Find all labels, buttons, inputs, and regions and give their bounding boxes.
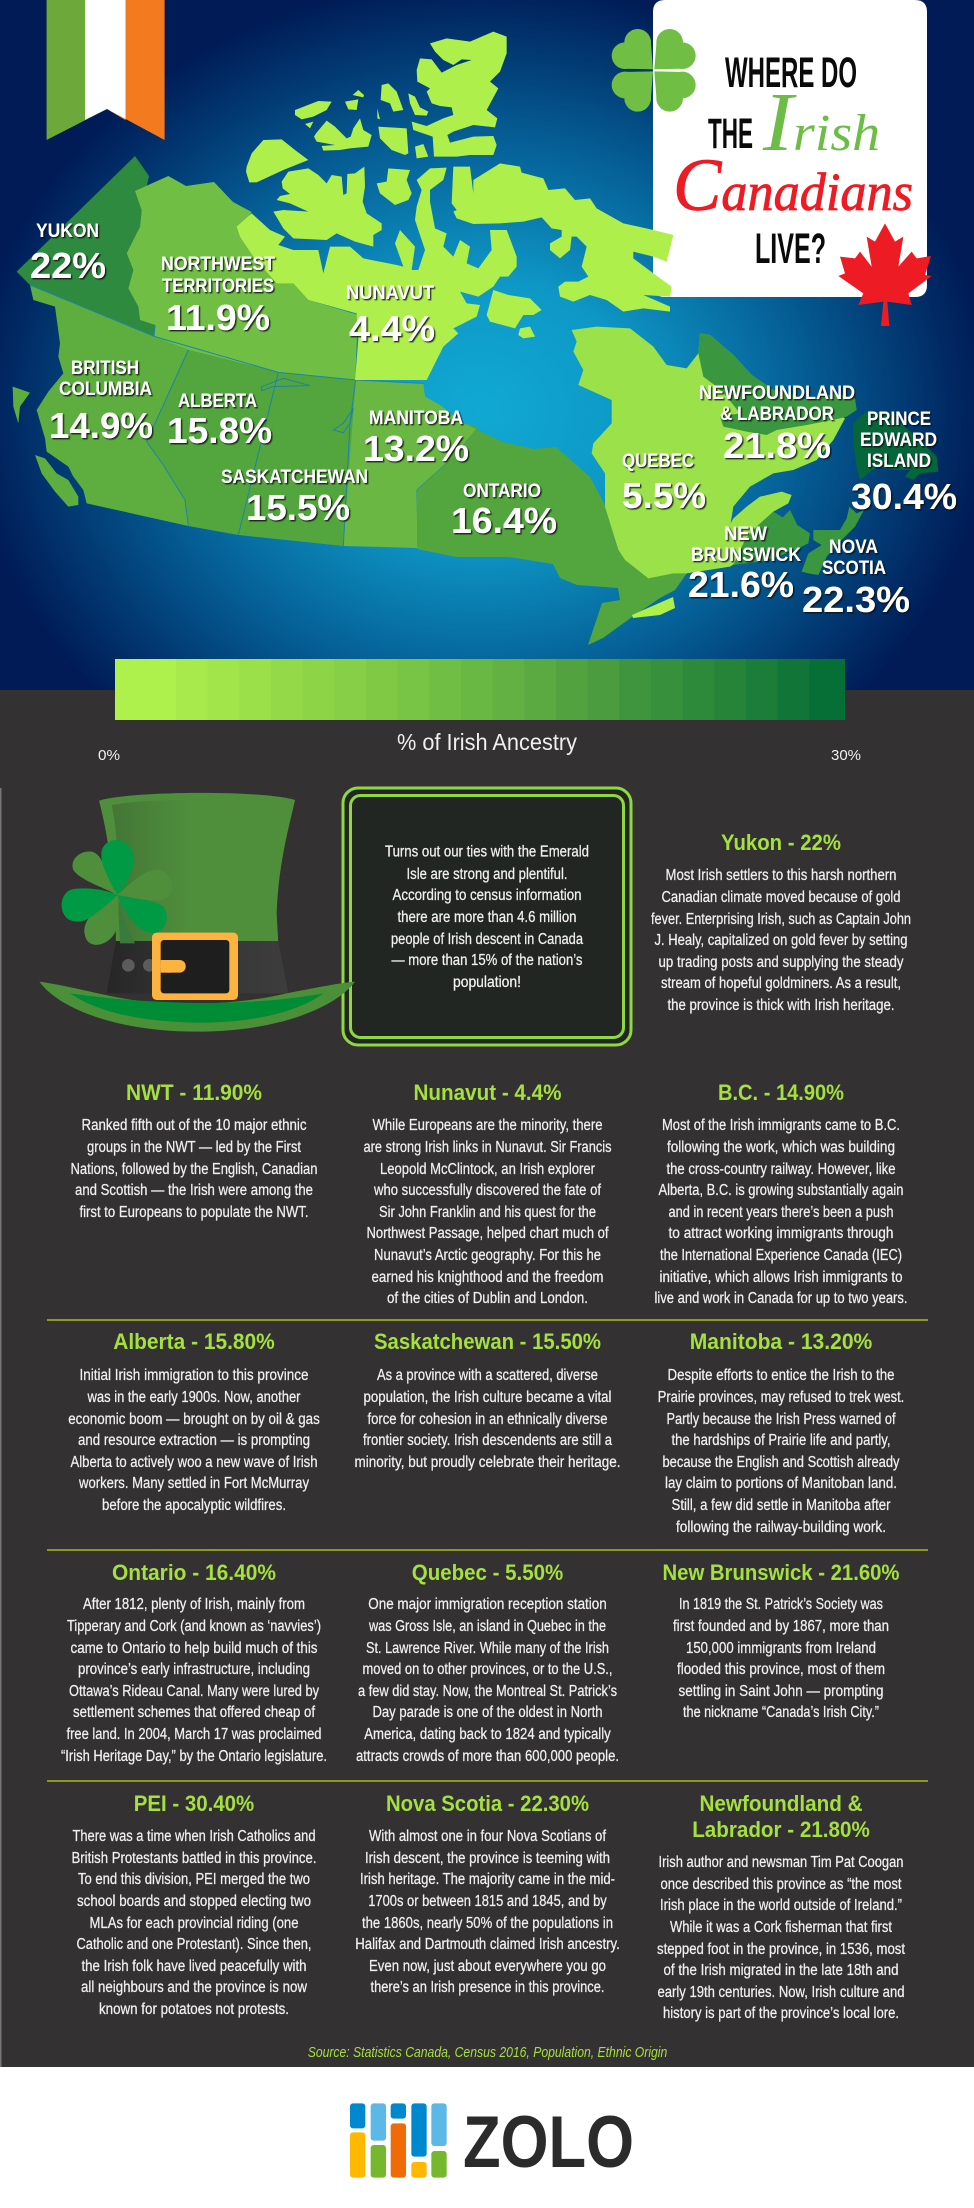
- text block: Quebec: One major immigration reception station: [368, 1596, 607, 1613]
- text block: B.C.: initiative, which allows Irish immigrants to: [660, 1269, 902, 1286]
- text block: NWT: Ranked fifth out of the 10 major ethnic: [82, 1117, 307, 1134]
- text block: PEI: the Irish folk have lived peacefully with: [82, 1958, 306, 1975]
- text block: Nova Scotia: there’s an Irish presence in this province.: [370, 1979, 604, 1996]
- text block: Quebec: Day parade is one of the oldest in North: [372, 1704, 602, 1721]
- text block: Yukon: [651, 830, 911, 1014]
- text block: New Brunswick: 150,000 immigrants from Ireland: [686, 1640, 876, 1657]
- text block: Alberta: Alberta to actively woo a new wave of Irish: [70, 1454, 318, 1471]
- text block: New Brunswick: the nickname “Canada’s Irish City.”: [683, 1704, 879, 1721]
- label: Saskatchewan: SASKATCHEWAN: [221, 467, 368, 488]
- text block: Newfoundland and Labrador: Irish place in the world outside of Ireland.”: [660, 1897, 902, 1914]
- callout text: Turns out our ties with the Emerald: [385, 844, 589, 860]
- text block: Saskatchewan: As a province with a scattered, diverse: [377, 1367, 598, 1384]
- label: New Brunswick: 21.6%: [688, 564, 794, 605]
- label: Alberta: 15.8%: [167, 410, 272, 451]
- text block: Ontario: free land. In 2004, March 17 was proclaimed: [66, 1726, 322, 1743]
- label: Quebec: 5.5%: [622, 475, 706, 516]
- text block: PEI: school boards and stopped electing two: [77, 1893, 311, 1910]
- province: Ontario: [417, 423, 687, 645]
- label: British Columbia: BRITISH: [71, 358, 139, 379]
- province: New Brunswick: [733, 510, 810, 565]
- title card: [653, 0, 927, 297]
- hat band: [107, 941, 288, 993]
- ribbon: Irish flag: [47, 0, 165, 140]
- logo: Zolo: [350, 2102, 634, 2183]
- text block: Yukon: J. Healy, capitalized on gold fever by setting: [654, 932, 908, 949]
- label: Prince Edward Island: [851, 409, 957, 517]
- callout text: According to census information: [392, 887, 582, 904]
- text block: Quebec: a few did stay. Now, the Montreal St. Patrick’s: [358, 1683, 617, 1700]
- label: New Brunswick: BRUNSWICK: [691, 545, 801, 566]
- text block: B.C.: Most of the Irish immigrants came to B.C.: [662, 1117, 900, 1134]
- text block: Ontario: Ottawa’s Rideau Canal. Many were lured by: [69, 1683, 319, 1700]
- province: Nunavut mainland: [237, 168, 517, 380]
- text block: Alberta: workers. Many settled in Fort McMurray: [78, 1475, 309, 1492]
- label: Yukon: [30, 221, 106, 286]
- text block: PEI: all neighbours and the province is now: [81, 1979, 308, 1996]
- text block: B.C.: B.C. - 14.90%: [718, 1080, 844, 1105]
- text block: Nunavut: [364, 1080, 612, 1307]
- text block: Newfoundland and Labrador: stepped foot in the province, in 1536, most: [657, 1941, 906, 1958]
- label: Northwest Territories: TERRITORIES: [162, 276, 274, 297]
- label: British Columbia: 14.9%: [49, 405, 153, 446]
- text block: Nova Scotia: Nova Scotia - 22.30%: [386, 1791, 589, 1816]
- title heading: LIVE?: [755, 225, 826, 273]
- callout outer frame: [343, 788, 631, 1045]
- hat crown shading: [112, 800, 287, 943]
- label: Manitoba: MANITOBA: [369, 408, 463, 429]
- label: Prince Edward Island: ISLAND: [867, 451, 931, 472]
- map of Canada: [13, 32, 938, 645]
- text block: Newfoundland and Labrador: history is part of the province’s local lore.: [663, 2005, 899, 2022]
- label: Alberta: ALBERTA: [178, 391, 257, 412]
- southern Ontario lime patch: [632, 597, 675, 618]
- text block: Quebec: moved on to other provinces, or to the U.S.,: [362, 1661, 612, 1678]
- label: Alberta: [167, 391, 272, 451]
- province: Nova Scotia: [802, 507, 864, 575]
- hat brim inner: [70, 993, 323, 1023]
- text block: Ontario: Tipperary and Cork (and known as ‘navvies’): [67, 1618, 321, 1635]
- label: Newfoundland and Labrador: NEWFOUNDLAND: [699, 383, 855, 404]
- text block: Newfoundland and Labrador: Irish author and newsman Tim Pat Coogan: [658, 1854, 904, 1871]
- text block: Nunavut: While Europeans are the minority, there: [372, 1117, 602, 1134]
- legend: colour scale bar: [115, 659, 845, 720]
- text block: Nova Scotia: Even now, just about everywhere you go: [369, 1958, 606, 1975]
- text block: B.C.: the cross-country railway. However, like: [666, 1161, 896, 1178]
- legend maximum: 30%: [831, 747, 861, 764]
- text block: Ontario: came to Ontario to help build much of this: [70, 1640, 318, 1657]
- text block: Nova Scotia: Irish descent, the province is teeming with: [365, 1850, 610, 1867]
- panel: white footer: [0, 2067, 974, 2208]
- label: Quebec: QUEBEC: [622, 451, 694, 472]
- text block: Nova Scotia: the 1860s, nearly 50% of the populations in: [362, 1915, 613, 1932]
- text block: Manitoba: Partly because the Irish Press warned of: [666, 1411, 896, 1428]
- island: Vancouver Island: [35, 455, 78, 507]
- text block: PEI: MLAs for each provincial riding (one: [90, 1915, 298, 1932]
- provincial boundary lines: [30, 285, 447, 552]
- province: Quebec: [572, 327, 845, 578]
- text block: NWT: NWT - 11.90%: [126, 1080, 262, 1105]
- text block: Ontario: [61, 1560, 327, 1765]
- text block: Manitoba: the hardships of Prairie life and partly,: [672, 1432, 890, 1449]
- text block: Nunavut: earned his knighthood and the freedom: [372, 1269, 604, 1286]
- text block: B.C.: following the work, which was building: [667, 1139, 895, 1156]
- text block: PEI: PEI - 30.40%: [134, 1791, 254, 1816]
- island: Banks: [246, 139, 308, 182]
- label: Yukon: 22%: [30, 245, 106, 286]
- text block: PEI: To end this division, PEI merged the two: [78, 1871, 310, 1888]
- text block: Nunavut: Nunavut - 4.4%: [414, 1080, 562, 1105]
- text block: Saskatchewan: [354, 1329, 620, 1471]
- text block: Yukon: Canadian climate moved because of gold: [662, 889, 900, 906]
- logo wordmark: ZOLO: [463, 2102, 634, 2183]
- province: Alberta: [147, 350, 278, 535]
- callout text: [385, 844, 589, 991]
- text block: PEI: [72, 1791, 316, 2018]
- text block: B.C.: to attract working immigrants through: [668, 1225, 894, 1242]
- text block: Nunavut: are strong Irish links in Nunavut. Sir Francis: [364, 1139, 612, 1156]
- label: Nova Scotia: 22.3%: [802, 579, 910, 620]
- text block: Alberta: was in the early 1900s. Now, another: [87, 1389, 300, 1406]
- text block: Newfoundland and Labrador: Newfoundland &: [700, 1791, 863, 1816]
- island: Haida Gwaii: [13, 387, 30, 423]
- text block: Manitoba: Despite efforts to entice the Irish to the: [668, 1367, 894, 1384]
- text block: Newfoundland and Labrador: Labrador - 21.80%: [692, 1817, 870, 1842]
- text block: Quebec: was Gross Isle, an island in Quebec in the: [368, 1618, 606, 1635]
- hat crown: [99, 793, 295, 943]
- source note: Source: Statistics Canada, Census 2016, Population, Ethnic Origin: [308, 2044, 667, 2061]
- text block: Nova Scotia: [355, 1791, 620, 1996]
- text block: NWT: first to Europeans to populate the NWT.: [80, 1204, 308, 1221]
- callout text: population!: [453, 974, 521, 991]
- text block: Ontario: Ontario - 16.40%: [112, 1560, 276, 1585]
- label: Saskatchewan: 15.5%: [246, 487, 350, 528]
- province: Yukon: [17, 156, 155, 337]
- text block: Saskatchewan: minority, but proudly celebrate their heritage.: [354, 1454, 620, 1471]
- text block: Newfoundland and Labrador: once described this province as “the most: [660, 1876, 902, 1893]
- western provinces and territories: [13, 156, 478, 552]
- label: British Columbia: COLUMBIA: [59, 379, 152, 400]
- text block: B.C.: [654, 1080, 908, 1307]
- text block: New Brunswick: flooded this province, most of them: [677, 1661, 885, 1678]
- province: Manitoba: [343, 380, 478, 548]
- text block: Yukon: up trading posts and supplying the steady: [658, 954, 904, 971]
- text block: Ontario: “Irish Heritage Day,” by the Ontario legislature.: [61, 1748, 327, 1765]
- label: Nunavut: [346, 283, 435, 349]
- text block: NWT: Nations, followed by the English, Canadian: [70, 1161, 318, 1178]
- label: Prince Edward Island: EDWARD: [860, 430, 937, 451]
- text block: Alberta: Initial Irish immigration to this province: [80, 1367, 308, 1384]
- text block: New Brunswick: New Brunswick - 21.60%: [662, 1560, 900, 1585]
- text block: Manitoba: [658, 1329, 904, 1536]
- label: Saskatchewan: [221, 467, 368, 528]
- label: Northwest Territories: [161, 254, 275, 338]
- text block: B.C.: Alberta, B.C. is growing substantially again: [658, 1182, 904, 1199]
- label: New Brunswick: NEW: [724, 524, 767, 545]
- text block: Nunavut: Leopold McClintock, an Irish explorer: [380, 1161, 595, 1178]
- text block: New Brunswick: settling in Saint John — prompting: [678, 1683, 884, 1700]
- label: Ontario: [451, 481, 557, 541]
- callout: intro box: [343, 788, 631, 1045]
- label: Manitoba: [363, 408, 469, 469]
- map labels: [30, 221, 957, 620]
- text block: Nova Scotia: Halifax and Dartmouth claimed Irish ancestry.: [355, 1936, 620, 1953]
- panel: blue map background: [0, 0, 974, 690]
- text block: Quebec: [356, 1560, 619, 1765]
- title heading: THE: [708, 110, 753, 158]
- text block: Manitoba: because the English and Scottish already: [662, 1454, 900, 1471]
- label: Newfoundland and Labrador: [699, 383, 855, 466]
- text block: Yukon: stream of hopeful goldminers. As a result,: [661, 975, 901, 992]
- label: Ontario: ONTARIO: [463, 481, 541, 502]
- text block: Quebec: St. Lawrence River. While many of the Irish: [366, 1640, 609, 1657]
- logo mark: [350, 2103, 447, 2178]
- province: Saskatchewan: [238, 372, 356, 546]
- text block: Manitoba: lay claim to portions of Manitoban land.: [665, 1475, 897, 1492]
- label: Nova Scotia: SCOTIA: [822, 558, 886, 579]
- island: Victoria: [273, 167, 382, 247]
- text block: Ontario: After 1812, plenty of Irish, mainly from: [83, 1596, 305, 1613]
- text block: Saskatchewan: population, the Irish culture became a vital: [364, 1389, 612, 1406]
- label: Quebec: [622, 451, 706, 516]
- label: Northwest Territories: 11.9%: [166, 297, 270, 338]
- hat shamrock: [62, 840, 173, 945]
- text block: Manitoba: Prairie provinces, may refused to trek west.: [658, 1389, 904, 1406]
- title heading: Irish: [762, 76, 880, 169]
- island: Southampton: [487, 290, 542, 328]
- text block: Quebec: America, dating back to 1824 and typically: [364, 1726, 611, 1743]
- label: Nunavut: 4.4%: [349, 308, 435, 349]
- text block: NWT: groups in the NWT — led by the First: [87, 1139, 302, 1156]
- province: Labrador: [698, 333, 857, 435]
- province: Northwest Territories: [127, 176, 358, 380]
- label: Newfoundland and Labrador: & LABRADOR: [720, 404, 834, 425]
- label: New Brunswick: [688, 524, 801, 605]
- text block: Saskatchewan: frontier society. Irish descendents are still a: [363, 1432, 612, 1449]
- text block: Yukon: Yukon - 22%: [721, 830, 841, 855]
- text block: Nunavut: Nunavut’s Arctic geography. For this he: [374, 1247, 601, 1264]
- island: Coats: [518, 327, 535, 338]
- label: Nova Scotia: [802, 537, 910, 620]
- text block: Yukon: the province is thick with Irish heritage.: [668, 997, 894, 1014]
- callout text: there are more than 4.6 million: [398, 909, 576, 926]
- text block: Nova Scotia: With almost one in four Nova Scotians of: [369, 1828, 607, 1845]
- text block: Quebec: Quebec - 5.50%: [412, 1560, 563, 1585]
- hat band dots: [122, 959, 156, 972]
- label: Newfoundland and Labrador: 21.8%: [723, 425, 831, 466]
- callout inner frame: [350, 796, 624, 1038]
- text block: Ontario: settlement schemes that offered cheap of: [73, 1704, 316, 1721]
- callout text: — more than 15% of the nation’s: [392, 952, 583, 969]
- text block: NWT: and Scottish — the Irish were among the: [75, 1182, 313, 1199]
- text block: Quebec: attracts crowds of more than 600,000 people.: [356, 1748, 619, 1765]
- title heading: Canadians: [673, 144, 913, 227]
- text block: Yukon: Most Irish settlers to this harsh northern: [666, 867, 896, 884]
- small Arctic islands: [295, 83, 428, 205]
- panel: blue radial glow: [0, 0, 974, 690]
- island: Newfoundland: [853, 410, 938, 480]
- text block: New Brunswick: first founded and by 1867, more than: [673, 1618, 889, 1635]
- text block: Alberta: before the apocalyptic wildfires.: [102, 1497, 286, 1514]
- island: Ellesmere and Devon: [412, 32, 507, 157]
- text block: Yukon: fever. Enterprising Irish, such as Captain John: [651, 911, 911, 928]
- label: Prince Edward Island: 30.4%: [851, 476, 957, 517]
- text block: Newfoundland and Labrador: While it was a Cork fisherman that first: [670, 1919, 893, 1936]
- text block: B.C.: the International Experience Canada (IEC): [660, 1247, 902, 1264]
- label: British Columbia: [49, 358, 153, 446]
- text block: Alberta: Alberta - 15.80%: [113, 1329, 275, 1354]
- island: Baffin: [452, 163, 673, 312]
- icon: leprechaun hat: [39, 793, 355, 1032]
- text block: PEI: known for potatoes not protests.: [99, 2001, 289, 2018]
- label: Nunavut: NUNAVUT: [346, 283, 434, 304]
- Nunavut and Arctic islands: [237, 32, 673, 380]
- text block: Manitoba: Manitoba - 13.20%: [690, 1329, 872, 1354]
- text block: Newfoundland and Labrador: early 19th centuries. Now, Irish culture and: [658, 1984, 904, 2001]
- text block: Nunavut: of the cities of Dublin and London.: [387, 1290, 588, 1307]
- text block: Nunavut: who successfully discovered the fate of: [373, 1182, 602, 1199]
- icon: maple leaf: [838, 223, 932, 326]
- text block: PEI: Catholic and one Protestant). Since then,: [76, 1936, 312, 1953]
- card background: [653, 0, 927, 297]
- text block: Newfoundland and Labrador: [657, 1791, 906, 2022]
- hat brim: [39, 982, 355, 1032]
- text block: Alberta: [68, 1329, 320, 1514]
- label: Northwest Territories: NORTHWEST: [161, 254, 275, 275]
- text block: Nova Scotia: 1700s or between 1815 and 1845, and by: [368, 1893, 607, 1910]
- callout text: people of Irish descent in Canada: [391, 931, 583, 948]
- text block: Saskatchewan: Saskatchewan - 15.50%: [374, 1329, 601, 1354]
- label: Nova Scotia: NOVA: [829, 537, 878, 558]
- legend minimum: 0%: [98, 747, 120, 764]
- text block: New Brunswick: [662, 1560, 900, 1721]
- eastern provinces: [572, 327, 938, 578]
- province: British Columbia: [30, 285, 188, 526]
- callout text: Isle are strong and plentiful.: [406, 866, 568, 883]
- text block: Saskatchewan: force for cohesion in an ethnically diverse: [368, 1411, 608, 1428]
- title heading: WHERE DO: [725, 49, 857, 97]
- text block: NWT: [70, 1080, 318, 1221]
- text block: Alberta: economic boom — brought on by oil & gas: [68, 1411, 320, 1428]
- label: Ontario: 16.4%: [451, 500, 557, 541]
- icon: shamrock: [612, 29, 696, 112]
- title heading: [673, 49, 913, 273]
- text block: B.C.: live and work in Canada for up to two years.: [654, 1290, 908, 1307]
- label: Prince Edward Island: PRINCE: [867, 409, 931, 430]
- text block: Nunavut: Northwest Passage, helped chart much of: [366, 1225, 609, 1242]
- text block: PEI: British Protestants battled in this province.: [72, 1850, 316, 1867]
- text block: Newfoundland and Labrador: of the Irish migrated in the late 18th and: [664, 1962, 898, 1979]
- label: Yukon: YUKON: [36, 221, 99, 242]
- belt buckle: [152, 933, 238, 1000]
- legend title: % of Irish Ancestry: [397, 729, 577, 755]
- text block: Ontario: province’s early infrastructure, including: [78, 1661, 310, 1678]
- text block: Nunavut: Sir John Franklin and his quest for the: [379, 1204, 596, 1221]
- text block: Manitoba: following the railway-building work.: [676, 1519, 886, 1536]
- text block: Manitoba: Still, a few did settle in Manitoba after: [672, 1497, 890, 1514]
- text block: Alberta: and resource extraction — is prompting: [78, 1432, 310, 1449]
- text block: PEI: There was a time when Irish Catholics and: [72, 1828, 316, 1845]
- text block: New Brunswick: In 1819 the St. Patrick’s Society was: [679, 1596, 883, 1613]
- text block: Nova Scotia: Irish heritage. The majority came in the mid-: [360, 1871, 615, 1888]
- text block: B.C.: and in recent years there’s been a push: [668, 1204, 894, 1221]
- label: Manitoba: 13.2%: [363, 428, 469, 469]
- panel: dark content background: [0, 690, 974, 2067]
